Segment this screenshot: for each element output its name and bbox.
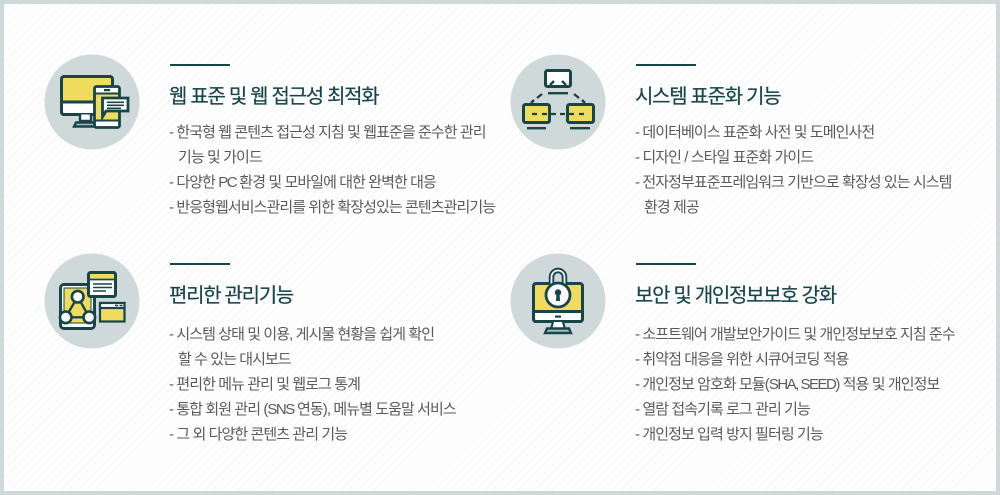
- text block: 환경 제공: [644, 199, 699, 216]
- divider line: [636, 263, 696, 265]
- text block: 할 수 있는 대시보드: [178, 351, 291, 368]
- heading: 시스템 표준화 기능: [635, 86, 780, 108]
- text block: - 열람 접속기록 로그 관리 기능: [635, 401, 810, 418]
- text block: - 통합 회원 관리 (SNS 연동), 메뉴별 도움말 서비스: [169, 401, 456, 418]
- text block: - 개인정보 입력 방지 필터링 기능: [635, 426, 823, 443]
- text block: [635, 124, 952, 216]
- text block: - 편리한 메뉴 관리 및 웹로그 통계: [169, 376, 360, 393]
- panel: convenient management: [44, 254, 456, 443]
- icon: network of monitors: [510, 54, 606, 150]
- heading: 편리한 관리기능: [169, 285, 293, 307]
- panel: security and privacy: [510, 254, 955, 443]
- heading: 보안 및 개인정보보호 강화: [635, 285, 836, 307]
- text block: - 디자인 / 스타일 표준화 가이드: [635, 149, 813, 166]
- text block: - 소프트웨어 개발보안가이드 및 개인정보보호 지침 준수: [635, 326, 955, 343]
- text block: - 개인정보 암호화 모듈(SHA, SEED) 적용 및 개인정보: [635, 376, 939, 393]
- divider line: [636, 64, 696, 66]
- divider line: [170, 263, 230, 265]
- heading: 웹 표준 및 웹 접근성 최적화: [169, 86, 378, 108]
- text block: - 데이터베이스 표준화 사전 및 도메인사전: [635, 124, 874, 141]
- icon: monitor and mobile: [44, 54, 140, 150]
- divider line: [170, 64, 230, 66]
- text block: - 한국형 웹 콘텐츠 접근성 지침 및 웹표준을 준수한 관리: [169, 124, 486, 141]
- text block: - 전자정부표준프레임워크 기반으로 확장성 있는 시스템: [635, 174, 952, 191]
- icon: tablet and windows: [44, 254, 140, 348]
- text block: - 반응형웹서비스관리를 위한 확장성있는 콘텐츠관리기능: [169, 199, 495, 216]
- text block: [169, 326, 456, 443]
- panel: web standards: [44, 54, 496, 216]
- text block: 기능 및 가이드: [178, 149, 262, 166]
- icon: padlock on monitor: [510, 254, 606, 348]
- text block: - 시스템 상태 및 이용, 게시물 현황을 쉽게 확인: [169, 326, 434, 343]
- text block: [169, 124, 496, 216]
- panel: system standardization: [510, 54, 952, 216]
- text block: - 그 외 다양한 콘텐츠 관리 기능: [169, 426, 347, 443]
- text block: - 취약점 대응을 위한 시큐어코딩 적용: [635, 351, 849, 368]
- text block: - 다양한 PC 환경 및 모바일에 대한 완벽한 대응: [169, 174, 436, 191]
- text block: [635, 326, 955, 443]
